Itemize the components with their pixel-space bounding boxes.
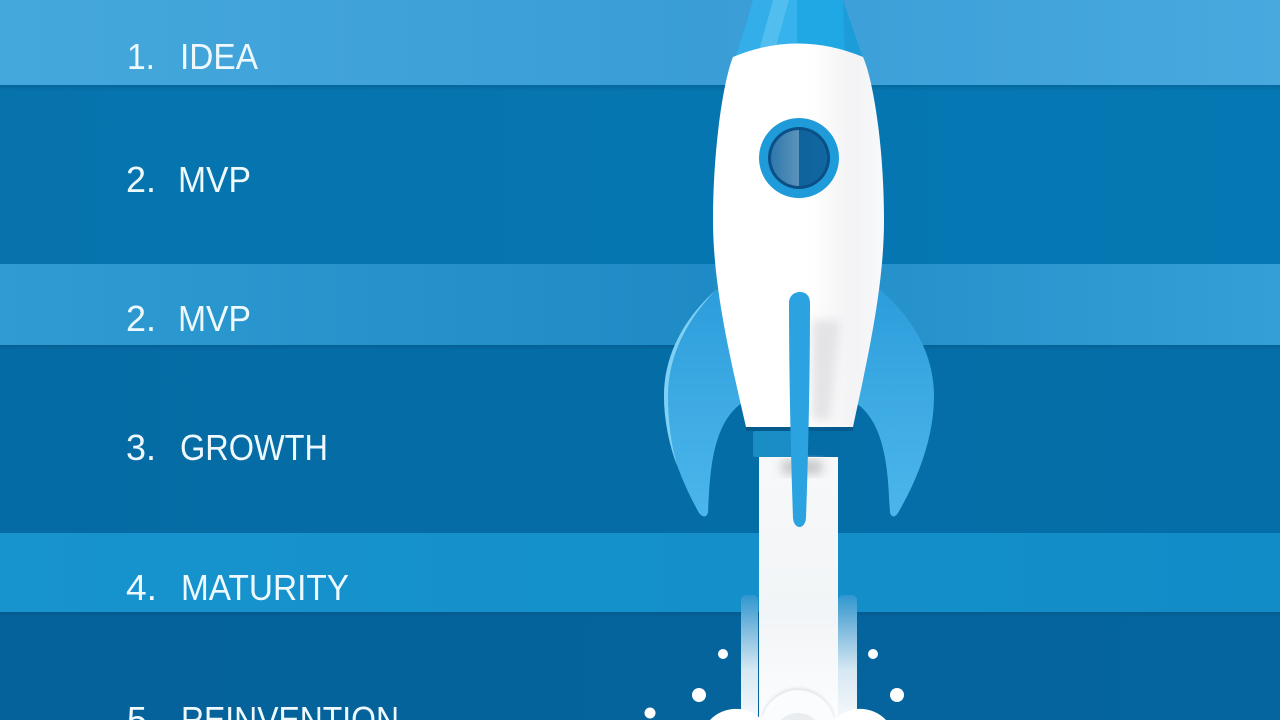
stage label: 2. MVP: MVP xyxy=(178,159,251,200)
rocket xyxy=(664,0,934,527)
left fin highlight xyxy=(664,289,717,466)
stage label: 2. MVP repeated: 2. xyxy=(126,298,156,339)
stage label: 3. GROWTH: GROWTH xyxy=(180,427,328,468)
stage label: 2. MVP: 2. xyxy=(126,159,156,200)
sparks xyxy=(644,649,904,718)
exhaust flame and smoke xyxy=(710,457,886,720)
collar xyxy=(753,431,793,457)
stage label: 4. MATURITY: MATURITY xyxy=(181,567,349,608)
porthole window xyxy=(759,118,839,198)
left fin xyxy=(664,287,742,516)
stage label: 4. MATURITY: 4. xyxy=(126,567,157,608)
stage label: 3. GROWTH: 3. xyxy=(126,427,156,468)
stage label: 1. IDEA: 1. xyxy=(127,36,155,77)
stage label: 2. MVP repeated xyxy=(126,298,251,339)
stage label: 2. MVP repeated: MVP xyxy=(178,298,251,339)
lower body shading xyxy=(812,320,840,420)
stage label: 1. IDEA: IDEA xyxy=(180,36,258,77)
nose cone xyxy=(735,0,863,58)
rocket body xyxy=(713,44,884,427)
right fin xyxy=(856,287,934,516)
shadow under rocket body xyxy=(746,427,853,431)
stage label: 1. IDEA xyxy=(127,36,258,77)
centre fin xyxy=(789,292,810,527)
stage label: 2. MVP xyxy=(126,159,251,200)
stage label: 3. GROWTH xyxy=(126,427,328,468)
